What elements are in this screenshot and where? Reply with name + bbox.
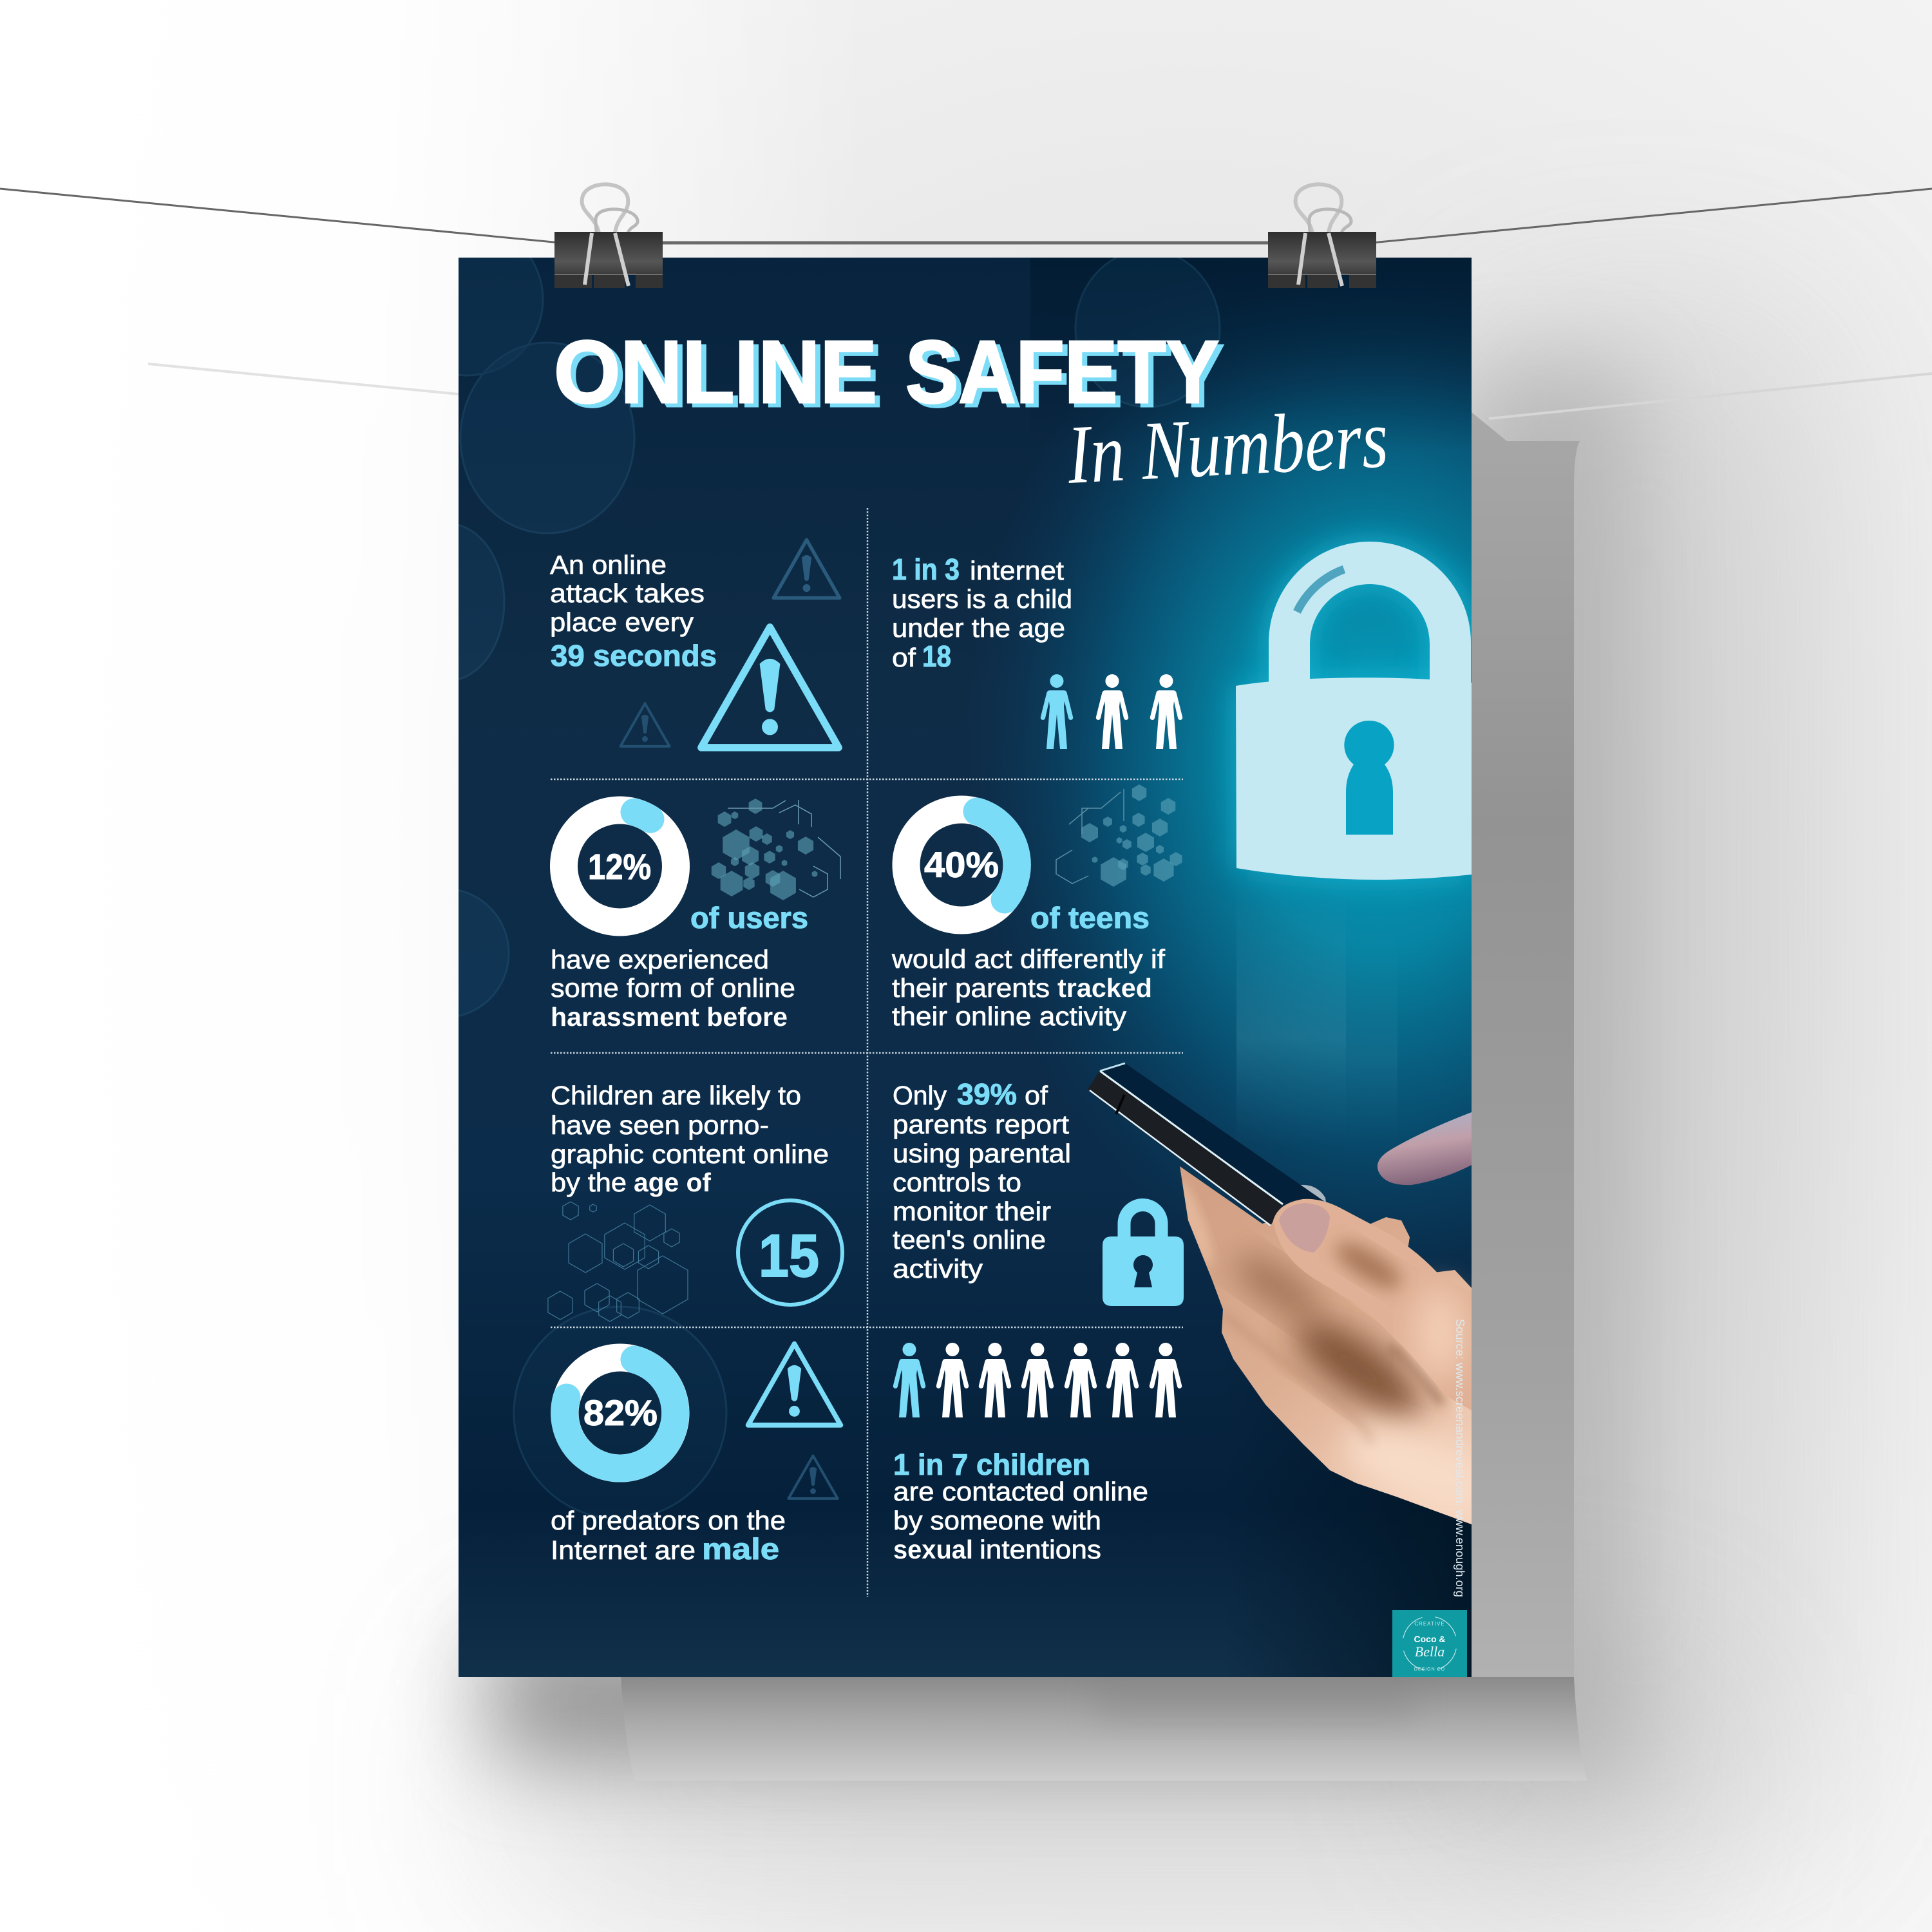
- text: parental controls: teen's online: [893, 1225, 1046, 1255]
- logo badge: Bella: [1415, 1643, 1444, 1660]
- text: 1 in 7: [893, 1448, 1148, 1564]
- panel: 40% of teens: [891, 784, 1182, 1031]
- light beam below lock: [1236, 956, 1397, 1097]
- text: harassment: harassment before: [551, 1002, 788, 1032]
- logo badge: [1392, 1610, 1467, 1677]
- text: attack frequency: An online: [550, 550, 667, 580]
- text: parental controls: Only: [893, 1081, 947, 1110]
- label: of users: of users: [690, 901, 808, 934]
- panel: age 15: [548, 1081, 842, 1321]
- text: 1 in 3: users is a child: [892, 584, 1072, 614]
- panel: parental controls: [893, 1077, 1184, 1306]
- text: 1 in 3: 18: [922, 639, 951, 673]
- text: children: by the: [551, 1168, 627, 1197]
- subtitle: In Numbers: [1065, 392, 1390, 502]
- text: predators: Internet are: [551, 1535, 696, 1565]
- title: ONLINE: [554, 323, 877, 422]
- icon: faint warning small: [620, 703, 670, 746]
- text: tracked: their parents: [892, 973, 1050, 1003]
- hanging wire shadows: [148, 364, 1932, 419]
- icon: large warning: [701, 627, 838, 748]
- hard cast shadow: [621, 412, 1587, 1781]
- badge: 15: 15: [759, 1222, 819, 1289]
- text: predators: of predators on the: [551, 1506, 786, 1535]
- text: predators: [551, 1506, 786, 1566]
- text: children: Children are likely to: [551, 1081, 801, 1110]
- bokeh circles: [459, 258, 1221, 1520]
- title: [554, 323, 1224, 426]
- text: 1 in 3: 1 in 3: [892, 553, 960, 586]
- donut 82%: [565, 1358, 676, 1468]
- panel: 1 in 7 children: [893, 1343, 1182, 1564]
- thumb: [1273, 1199, 1472, 1410]
- icon: three people: [1041, 674, 1182, 749]
- text: 1 in 3: of: [892, 643, 916, 672]
- text: parental controls: monitor their: [893, 1197, 1051, 1226]
- text: 1 in 3: [892, 553, 1072, 673]
- hexagon outlines: [548, 1202, 688, 1321]
- dividers: [551, 508, 1183, 1597]
- text: 1 in 3: internet: [970, 556, 1065, 585]
- title: ONLINE: [559, 327, 882, 426]
- hand palm: [1171, 1159, 1501, 1533]
- text: children: age of: [634, 1168, 711, 1197]
- panel: attack stat: [550, 540, 840, 748]
- text: tracked: their online activity: [892, 1001, 1127, 1031]
- icon: faint warning top: [773, 540, 840, 598]
- text: parental controls: [893, 1077, 1071, 1283]
- hanging wire: [0, 189, 1932, 243]
- small fingertip behind phone: [1300, 1185, 1327, 1208]
- donut 40%: 40%: [924, 844, 999, 885]
- icon: left binder clip: [554, 184, 663, 288]
- image: finger: [1378, 1112, 1472, 1185]
- icon: faint warning: [788, 1455, 838, 1499]
- icon: small padlock: [1103, 1205, 1184, 1306]
- text: 1 in 7: sexual: [893, 1535, 973, 1564]
- logo badge: CREATIVE: [1414, 1621, 1445, 1627]
- donut 82%: 82%: [583, 1392, 658, 1433]
- text: attack frequency: place every: [550, 607, 694, 637]
- text: parental controls: using parental: [893, 1139, 1071, 1168]
- text: 1 in 7: intentions: [980, 1535, 1101, 1564]
- text: tracked: [891, 944, 1166, 1031]
- donut 40%: [906, 810, 1017, 920]
- soft poster shadow: [489, 322, 1803, 1880]
- text: parental controls: controls to: [893, 1168, 1021, 1197]
- text: 1 in 3: under the age: [892, 613, 1065, 643]
- text: parental controls: of: [1025, 1081, 1048, 1110]
- title: SAFETY: [911, 327, 1224, 426]
- icon: warning: [748, 1344, 840, 1425]
- text: harassment: have experienced: [551, 945, 769, 974]
- phone: [1088, 1063, 1327, 1226]
- text: parental controls: 39%: [957, 1077, 1017, 1111]
- text: 1 in 7: 1 in 7 children: [893, 1448, 1090, 1481]
- logo badge: Coco &: [1414, 1634, 1445, 1644]
- text: attack frequency: 39 seconds: [551, 639, 717, 672]
- text: children: have seen porno-: [551, 1110, 769, 1140]
- icon: big padlock: [1236, 542, 1472, 880]
- text: tracked: would act differently if: [891, 944, 1166, 974]
- text: 1 in 7: by someone with: [893, 1506, 1101, 1535]
- donut 12%: 12%: [588, 846, 651, 887]
- text: attack frequency: [550, 550, 717, 672]
- icon: right binder clip: [1268, 184, 1376, 288]
- hexagon cluster: [1056, 784, 1182, 887]
- text: parental controls: activity: [893, 1254, 983, 1283]
- text: parental controls: parents report: [893, 1110, 1070, 1139]
- donut 12%: [564, 810, 676, 922]
- text: children: graphic content online: [551, 1139, 829, 1169]
- text: attack frequency: attack takes: [550, 578, 705, 608]
- text: harassment: [551, 945, 795, 1032]
- text: children: [551, 1081, 829, 1197]
- source note: Source: www.screenandreveal.com, www.enough.org: [1454, 1319, 1466, 1597]
- label: of teens: of teens: [1030, 901, 1150, 934]
- badge: 15: [738, 1200, 842, 1305]
- hexagon cluster: [712, 799, 840, 900]
- panel: 82% predators: [551, 1344, 840, 1566]
- panel: poster: [459, 258, 1472, 1677]
- icon: seven people: [893, 1343, 1182, 1417]
- image: hand holding phone: [1088, 1063, 1501, 1533]
- text: predators: male: [702, 1532, 779, 1566]
- title: SAFETY: [905, 323, 1219, 422]
- text: tracked: tracked: [1057, 973, 1152, 1003]
- text: 1 in 7: are contacted online: [893, 1477, 1148, 1506]
- text: harassment: some form of online: [551, 973, 795, 1003]
- panel: 1 in 3 stat: [892, 553, 1182, 749]
- logo badge: DESIGN CO: [1414, 1667, 1445, 1672]
- panel: 12% of users: [551, 799, 840, 1032]
